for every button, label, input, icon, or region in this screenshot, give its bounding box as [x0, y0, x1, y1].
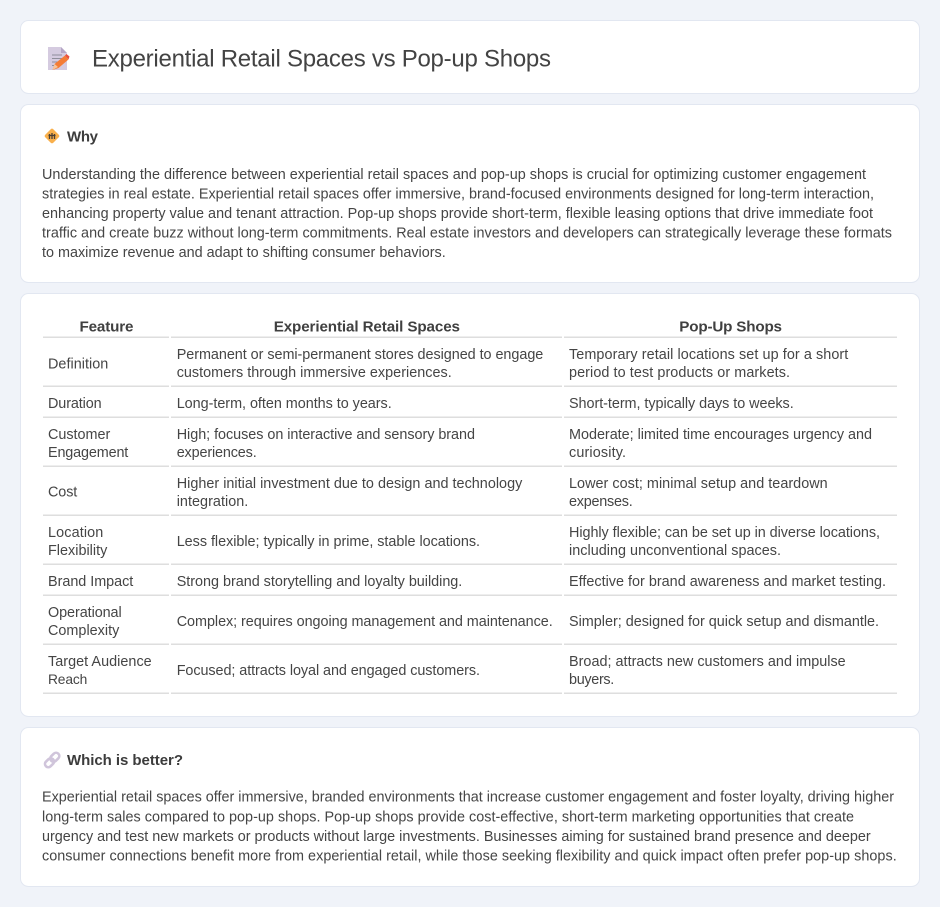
table header row [80, 319, 782, 336]
row: definition: period to test products or markets. [569, 365, 790, 381]
row: duration: Duration [48, 396, 102, 412]
row: target audience reach: Broad; attracts new customers and impulse [569, 654, 846, 670]
text block: which paragraph: consumer connections benefit more from experiential retail, while those seeking flexibility and quick impact often prefer pop-up shops. [42, 849, 897, 865]
table header row: Feature [80, 319, 134, 336]
row: definition: Temporary retail locations set up for a short [569, 347, 848, 363]
row: target audience reach: Focused; attracts loyal and engaged customers. [177, 663, 480, 679]
row: duration: Long-term, often months to years. [177, 396, 392, 412]
text block: why paragraph: traffic and create buzz without long-term commitments. Real estate investors and developers can strategically leverage these formats [42, 225, 892, 241]
row: cost: expenses. [569, 494, 633, 510]
row: cost: Higher initial investment due to design and technology [177, 476, 523, 492]
row: definition [48, 347, 848, 381]
text block: why paragraph: to maximize revenue and adapt to shifting consumer behaviors. [42, 245, 446, 261]
row: customer engagement [48, 427, 872, 461]
row: operational complexity: Complex; requires ongoing management and maintenance. [177, 614, 553, 630]
row: customer engagement: High; focuses on interactive and sensory brand [177, 427, 475, 443]
row: location flexibility: Location [48, 525, 103, 541]
row: operational complexity: Simpler; designed for quick setup and dismantle. [569, 614, 879, 630]
text block: why paragraph: Understanding the difference between experiential retail spaces and pop-up shops is crucial for optimizing customer engagement [42, 167, 866, 183]
row: cost [48, 476, 828, 510]
row: brand impact: Brand Impact [48, 574, 133, 590]
row: definition: Permanent or semi-permanent stores designed to engage [177, 347, 543, 363]
row: brand impact [48, 574, 886, 590]
row: operational complexity: Complexity [48, 623, 120, 639]
row: customer engagement: Customer [48, 427, 111, 443]
row: target audience reach: buyers. [569, 672, 614, 688]
text block: why paragraph [42, 167, 892, 261]
panel: comparison table [20, 294, 920, 716]
text block: which paragraph: urgency and test new markets or products without large investments. Businesses aiming for sustained brand presence and deeper [42, 829, 871, 845]
text block: which paragraph: long-term sales compared to pop-up shops. Pop-up shops provide cost-effective, short-term marketing opportunities that create [42, 810, 854, 826]
row: location flexibility: including unconventional spaces. [569, 543, 781, 559]
panel: which is better [20, 728, 920, 886]
text block: which paragraph: Experiential retail spaces offer immersive, branded environments that increase customer engagement and foster loyalty, driving higher [42, 790, 894, 806]
table header row: Experiential Retail Spaces [274, 319, 460, 336]
row: location flexibility: Highly flexible; can be set up in diverse locations, [569, 525, 880, 541]
row: target audience reach: Target Audience [48, 654, 152, 670]
text block: why paragraph: strategies in real estate. Experiential retail spaces offer immersive, brand-focused environments designed for long-term interaction, [42, 186, 874, 202]
row: duration [48, 396, 794, 412]
panel: title [20, 20, 920, 94]
icon: chain link [44, 751, 61, 769]
row: location flexibility: Flexibility [48, 543, 108, 559]
row: definition: customers through immersive experiences. [177, 365, 452, 381]
row: customer engagement: experiences. [177, 445, 257, 461]
row: cost: Cost [48, 485, 77, 501]
row: cost: Lower cost; minimal setup and teardown [569, 476, 828, 492]
icon: memo with pencil [48, 47, 70, 70]
row: target audience reach [48, 654, 846, 688]
panel: why [20, 104, 920, 282]
row: location flexibility [48, 525, 880, 559]
row: brand impact: Effective for brand awareness and market testing. [569, 574, 886, 590]
row: customer engagement: Engagement [48, 445, 128, 461]
icon: diamond road sign [44, 128, 60, 144]
row: operational complexity [48, 605, 879, 639]
row: duration: Short-term, typically days to weeks. [569, 396, 794, 412]
row: operational complexity: Operational [48, 605, 122, 621]
row: customer engagement: Moderate; limited time encourages urgency and [569, 427, 872, 443]
row: target audience reach: Reach [48, 672, 87, 687]
row: cost: integration. [177, 494, 248, 510]
heading: which is better: Which is better? [67, 752, 183, 769]
text block: which paragraph [42, 790, 897, 865]
table header row: Pop-Up Shops [679, 319, 782, 336]
row: brand impact: Strong brand storytelling and loyalty building. [177, 574, 462, 590]
heading: title: Experiential Retail Spaces vs Pop-up Shops [92, 46, 551, 72]
row: location flexibility: Less flexible; typically in prime, stable locations. [177, 534, 480, 550]
row: definition: Definition [48, 356, 108, 372]
heading: why: Why [67, 129, 99, 146]
row: customer engagement: curiosity. [569, 445, 626, 461]
text block: why paragraph: enhancing property value and tenant attraction. Pop-up shops provide short-term, flexible leasing options that drive immediate foot [42, 206, 873, 222]
